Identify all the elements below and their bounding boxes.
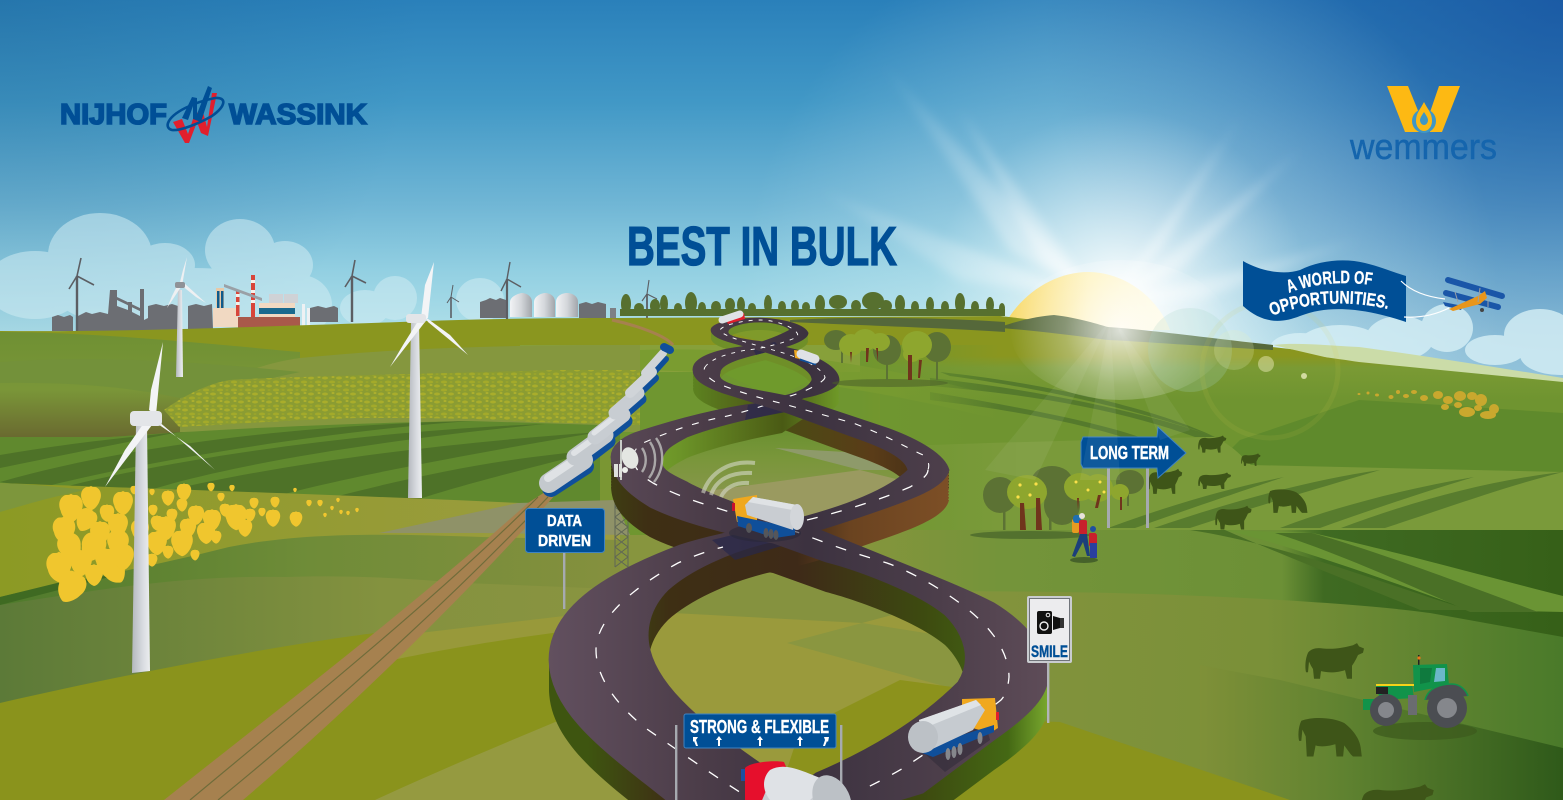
yellow flowers right [1358,390,1499,419]
far dark ridge near sun [790,315,1273,350]
pale far hill right [1273,344,1563,384]
red tanker truck [741,761,859,800]
sign: data driven: DATA [547,513,582,530]
factory [213,275,310,328]
logo: wemmers: wemmers [1349,126,1497,167]
sign: smile speed camera [1027,596,1072,723]
hikers [1070,513,1098,563]
wind turbine mid-left [167,257,206,377]
sign: strong and flexible [675,714,842,800]
biplane towing banner [1401,280,1502,317]
sign: long term arrow [1081,427,1186,528]
road: main loop [549,457,1048,800]
upper loop ground [720,322,812,398]
sign: data driven: DRIVEN [538,533,591,550]
logo: wemmers [1349,86,1497,167]
far ground [0,316,1563,800]
yellow tanker truck [729,495,804,542]
left lower hills [0,483,700,800]
road: middle loop [611,367,949,488]
railway track [164,320,673,800]
sun [1006,272,1170,330]
tree line on horizon [620,292,1005,316]
road: top loop [693,318,839,388]
trees near long term sign [970,466,1144,539]
yellow flower field [46,483,359,608]
trees behind road [824,329,951,387]
herd of cows [1148,436,1434,800]
sign: data driven [526,508,604,609]
left striped field [0,421,600,510]
wind turbine large right [390,262,468,498]
big loop ground [640,560,975,800]
clouds right [1270,304,1563,375]
banner: a world of opportunities: A WORLD OF [1288,270,1373,293]
logo: Nijhof Wassink [60,86,367,143]
sign: strong and flexible: STRONG & FLEXIBLE [690,716,829,737]
central ground [520,345,1120,800]
rapeseed field far [164,370,640,427]
wifi signal above truck [703,463,755,497]
right striped field [1108,470,1563,528]
tractor [1363,655,1477,740]
sun rays [820,60,1360,300]
small red truck far [722,313,745,324]
banner: a world of opportunities [1243,260,1406,322]
right upper hills [880,322,1563,540]
wind turbine large left [105,342,215,673]
small yellow truck [794,350,816,364]
freight train [548,347,670,488]
title: BEST IN BULK [627,215,897,277]
right lower hills [860,530,1563,800]
satellite dish and mast [614,438,662,482]
lower right tanker truck [908,698,999,772]
silos [480,293,616,318]
lens flare and glare [985,260,1338,480]
clouds left [0,213,504,335]
tall lattice tower [612,480,631,567]
sign: long term arrow: LONG TERM [1090,443,1169,463]
banner: a world of opportunities: OPPORTUNITIES. [1269,290,1388,315]
sign: smile speed camera: SMILE [1031,642,1068,661]
logo: Nijhof Wassink: NIJHOF [60,99,167,131]
mid loop ground [655,410,915,530]
logo: Nijhof Wassink: WASSINK [229,99,367,131]
refinery skyline [52,289,338,334]
sky background [0,0,1563,500]
left hills [0,332,640,437]
distant turbines [69,258,657,332]
